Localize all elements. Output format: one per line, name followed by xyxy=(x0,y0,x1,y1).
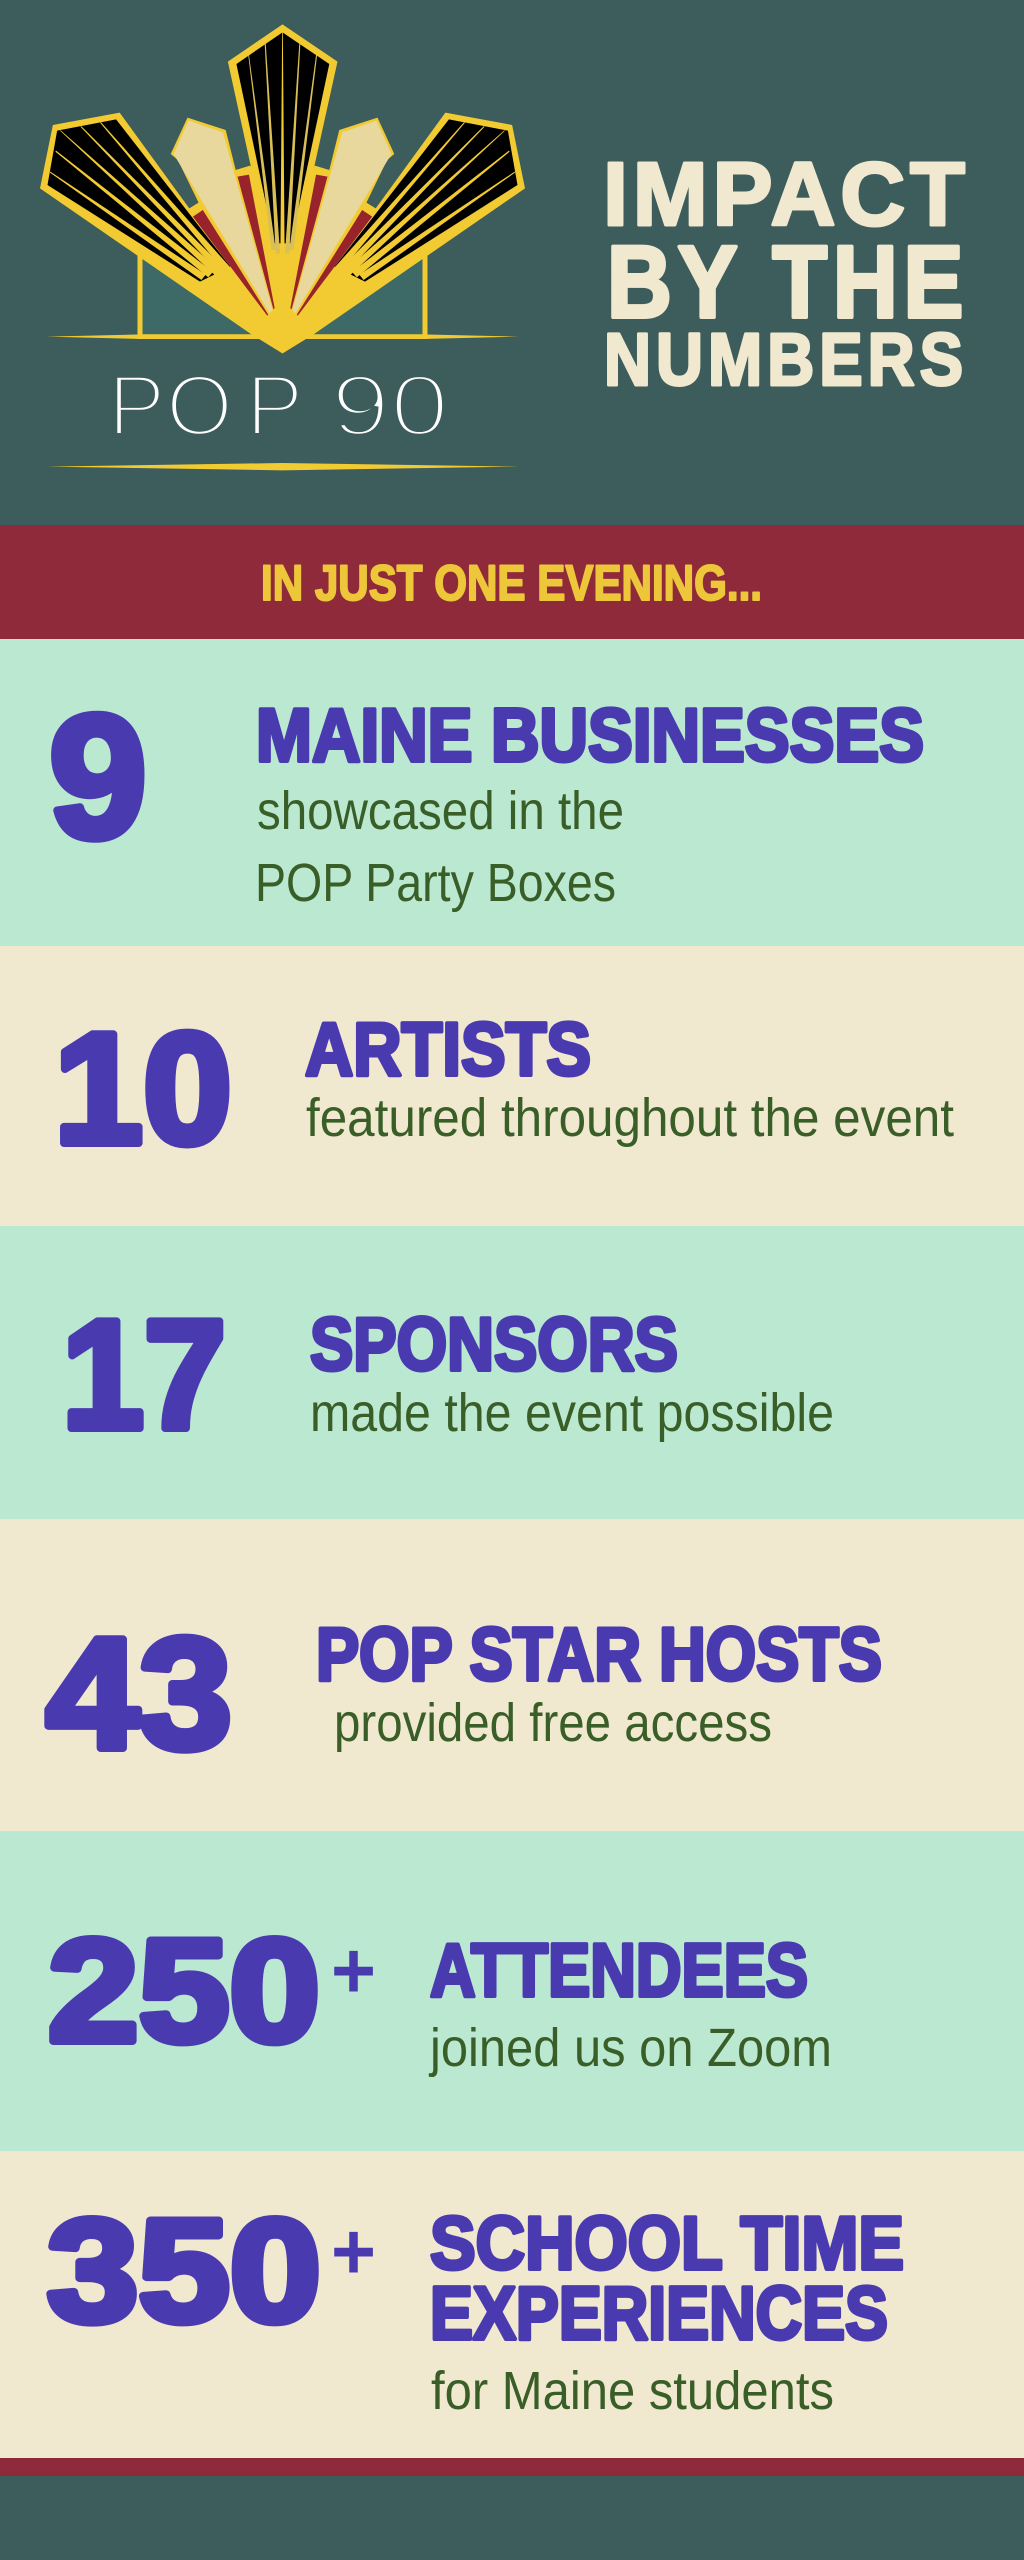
panel: attendees: + xyxy=(331,1926,376,2015)
panel: pop star hosts xyxy=(0,1519,1024,1831)
panel: school time experiences: EXPERIENCES xyxy=(430,2271,888,2355)
panel: maine businesses: POP Party Boxes xyxy=(255,853,616,913)
panel: pop star hosts: provided free access xyxy=(334,1693,772,1753)
panel: maine businesses: 9 xyxy=(49,680,147,875)
panel: pop star hosts: POP STAR HOSTS xyxy=(316,1612,882,1696)
panel: attendees: 250 xyxy=(48,1909,320,2072)
panel: artists xyxy=(0,946,1024,1226)
logo backdrop panel xyxy=(140,253,425,337)
panel: sponsors: 17 xyxy=(62,1288,226,1461)
panel: attendees: joined us on Zoom xyxy=(428,2018,832,2078)
title xyxy=(603,145,965,401)
banner: in just one evening: IN JUST ONE EVENING... xyxy=(261,555,762,611)
panel: sponsors xyxy=(0,1226,1024,1519)
panel: artists: featured throughout the event xyxy=(306,1088,954,1148)
panel: maine businesses xyxy=(0,639,1024,946)
panel: school time experiences: for Maine students xyxy=(431,2361,834,2421)
panel: sponsors: SPONSORS xyxy=(310,1302,678,1386)
logo wordmark: 90 xyxy=(331,358,449,454)
footer strip xyxy=(0,2458,1024,2476)
panel: maine businesses: showcased in the xyxy=(257,781,624,841)
logo wordmark xyxy=(108,358,449,454)
panel: artists: ARTISTS xyxy=(305,1007,591,1091)
logo wordmark: POP xyxy=(108,358,303,454)
panel: attendees xyxy=(0,1831,1024,2151)
panel: school time experiences xyxy=(0,2151,1024,2458)
title: IMPACT xyxy=(603,145,965,245)
title: BY THE xyxy=(607,226,963,339)
title: NUMBERS xyxy=(604,318,963,401)
panel: artists: 10 xyxy=(54,1001,232,1177)
panel: sponsors: made the event possible xyxy=(310,1383,834,1443)
logo: POP 90 xyxy=(40,24,525,470)
panel: maine businesses: MAINE BUSINESSES xyxy=(256,693,924,777)
panel: attendees: ATTENDEES xyxy=(430,1928,808,2012)
panel: school time experiences: 350 xyxy=(47,2189,321,2352)
panel: school time experiences: + xyxy=(331,2207,376,2296)
panel: pop star hosts: 43 xyxy=(46,1606,232,1782)
panel: school time experiences: SCHOOL TIME xyxy=(430,2201,904,2285)
banner: in just one evening xyxy=(0,525,1024,639)
